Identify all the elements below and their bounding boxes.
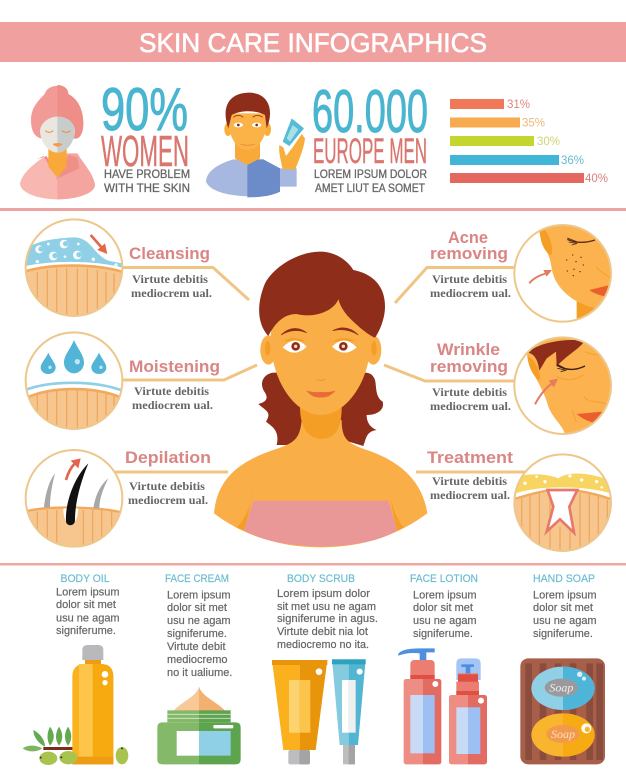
column: body scrub text: Lorem ipsum dolor (277, 588, 370, 600)
column: face lotion text: dolor sit met (413, 602, 473, 614)
column: face cream text (165, 573, 232, 679)
icon: woman with face mask (20, 85, 95, 199)
heading: cleansing: Virtute debitis (132, 274, 209, 286)
column: face cream text: Lorem ipsum (167, 590, 231, 602)
heading: depilation: mediocrem ual. (128, 495, 208, 507)
column: hand soap text: HAND SOAP (533, 573, 595, 585)
column: face cream text: signiferume. (167, 628, 227, 640)
stat: 60.000 Europe men (312, 78, 428, 195)
heading: wrinkle removing: Wrinkle (437, 340, 500, 359)
column: face cream text: FACE CREAM (165, 573, 229, 585)
column: hand soap text (533, 573, 597, 640)
column: face lotion text (410, 573, 478, 640)
column: body scrub text: signiferume in agus. (277, 613, 378, 625)
stat: 90% women: 90% (101, 76, 188, 143)
column: face lotion text: Lorem ipsum (413, 590, 477, 602)
column: body oil text: dolor sit met (56, 599, 116, 611)
icon: moistening (23, 332, 125, 433)
column: face lotion text: usu ne agam (413, 615, 477, 627)
heading: depilation: Virtute debitis (129, 481, 206, 493)
bar chart (450, 99, 608, 185)
column: body scrub text: Virtute debit nia lot (277, 626, 368, 638)
stat: 60.000 Europe men: AMET LIUT EA SOMET (315, 181, 426, 195)
heading: treatment: Treatment (427, 448, 513, 467)
column: body scrub text (277, 573, 378, 651)
brows (281, 328, 358, 335)
heading: treatment (427, 448, 513, 502)
column: face lotion text: signiferume. (413, 628, 473, 640)
top (244, 501, 397, 546)
top hair (259, 252, 385, 338)
icon: hand soap dish: Soap (549, 681, 573, 695)
icon: treatment (513, 454, 613, 553)
column: body oil text: BODY OIL (60, 573, 110, 585)
column: body scrub text: mediocremo no ita. (277, 639, 369, 651)
heading: depilation: Depilation (125, 448, 211, 467)
stat: 90% women: HAVE PROBLEM (104, 167, 190, 181)
column: hand soap text: signiferume. (533, 628, 593, 640)
column: face cream text: usu ne agam (167, 615, 231, 627)
heading: wrinkle removing (430, 340, 511, 413)
column: body scrub text: BODY SCRUB (287, 573, 355, 585)
text: EUROPE MEN (313, 132, 427, 171)
column: hand soap text: usu ne agam (533, 615, 597, 627)
icon: body oil bottle (23, 645, 128, 765)
heading: wrinkle removing: mediocrem ual. (430, 401, 511, 413)
bar chart: 30% (537, 136, 560, 148)
heading: moistening (129, 357, 220, 412)
stat: 90% women: WITH THE SKIN (104, 181, 190, 195)
icon: man with tube (206, 93, 305, 197)
column: body oil text: usu ne agam (56, 612, 120, 624)
bar chart: 36% (561, 155, 584, 167)
heading: depilation (125, 448, 211, 507)
column: face cream text: Virtute debit (167, 641, 226, 653)
heading: acne removing: mediocrem ual. (430, 288, 511, 300)
heading: moistening: Virtute debitis (134, 386, 210, 398)
heading: moistening: Moistening (129, 357, 220, 376)
ears (260, 335, 276, 365)
icon: face lotion bottles (398, 648, 487, 764)
icon: body scrub tubes (272, 659, 366, 764)
heading: cleansing: mediocrem ual. (131, 288, 212, 300)
heading: wrinkle removing: removing (430, 357, 508, 376)
icon: face cream jar (157, 687, 241, 764)
bar chart: 35% (522, 118, 545, 130)
column: face cream text: dolor sit met (167, 602, 227, 614)
neck shadow (300, 407, 342, 439)
title banner (0, 22, 626, 62)
stat: 60.000 Europe men: LOREM IPSUM DOLOR (314, 167, 427, 181)
icon: hand soap dish: Soap (551, 727, 575, 741)
stat: 90% women: WOMEN (101, 127, 189, 176)
column: face cream text: mediocremo (167, 654, 228, 666)
icon: hand soap dish (520, 658, 605, 764)
connector lines (115, 268, 525, 472)
stat: 60.000 Europe men: 60.000 (312, 78, 428, 145)
heading: acne removing (430, 228, 511, 300)
heading: wrinkle removing: Virtute debitis (432, 387, 508, 399)
heading: acne removing: Acne (448, 228, 488, 247)
column: face cream text: no it ualiume. (167, 667, 232, 679)
face (271, 297, 371, 415)
column: body scrub text: sit met usu ne agam (277, 601, 376, 613)
icon: depilation (23, 450, 125, 550)
bar chart: 31% (507, 99, 530, 111)
heading: treatment: Virtute debitis (432, 476, 508, 488)
heading: acne removing: removing (430, 244, 508, 263)
heading: acne removing: Virtute debitis (432, 274, 508, 286)
icon: wrinkle removing (514, 333, 617, 437)
bar chart: 40% (585, 173, 608, 185)
icon: acne removing (514, 220, 613, 323)
icon: cleansing (23, 219, 125, 320)
title banner: SKIN CARE INFOGRAPHICS (139, 28, 487, 58)
heading: cleansing: Cleansing (129, 244, 210, 263)
heading: treatment: mediocrem ual. (430, 490, 510, 502)
shoulders (214, 420, 427, 547)
heading: moistening: mediocrem ual. (132, 400, 213, 412)
central woman figure (214, 252, 427, 547)
column: body oil text: signiferume. (56, 625, 116, 637)
column: hand soap text: dolor sit met (533, 602, 593, 614)
column: face lotion text: FACE LOTION (410, 573, 478, 585)
stat: 90% women (101, 76, 190, 195)
lower hair (258, 373, 383, 446)
eyes (283, 338, 356, 342)
column: hand soap text: Lorem ipsum (533, 590, 597, 602)
column: body oil text: Lorem ipsum (56, 586, 120, 598)
column: body oil text (56, 573, 120, 637)
heading: cleansing (129, 244, 212, 300)
